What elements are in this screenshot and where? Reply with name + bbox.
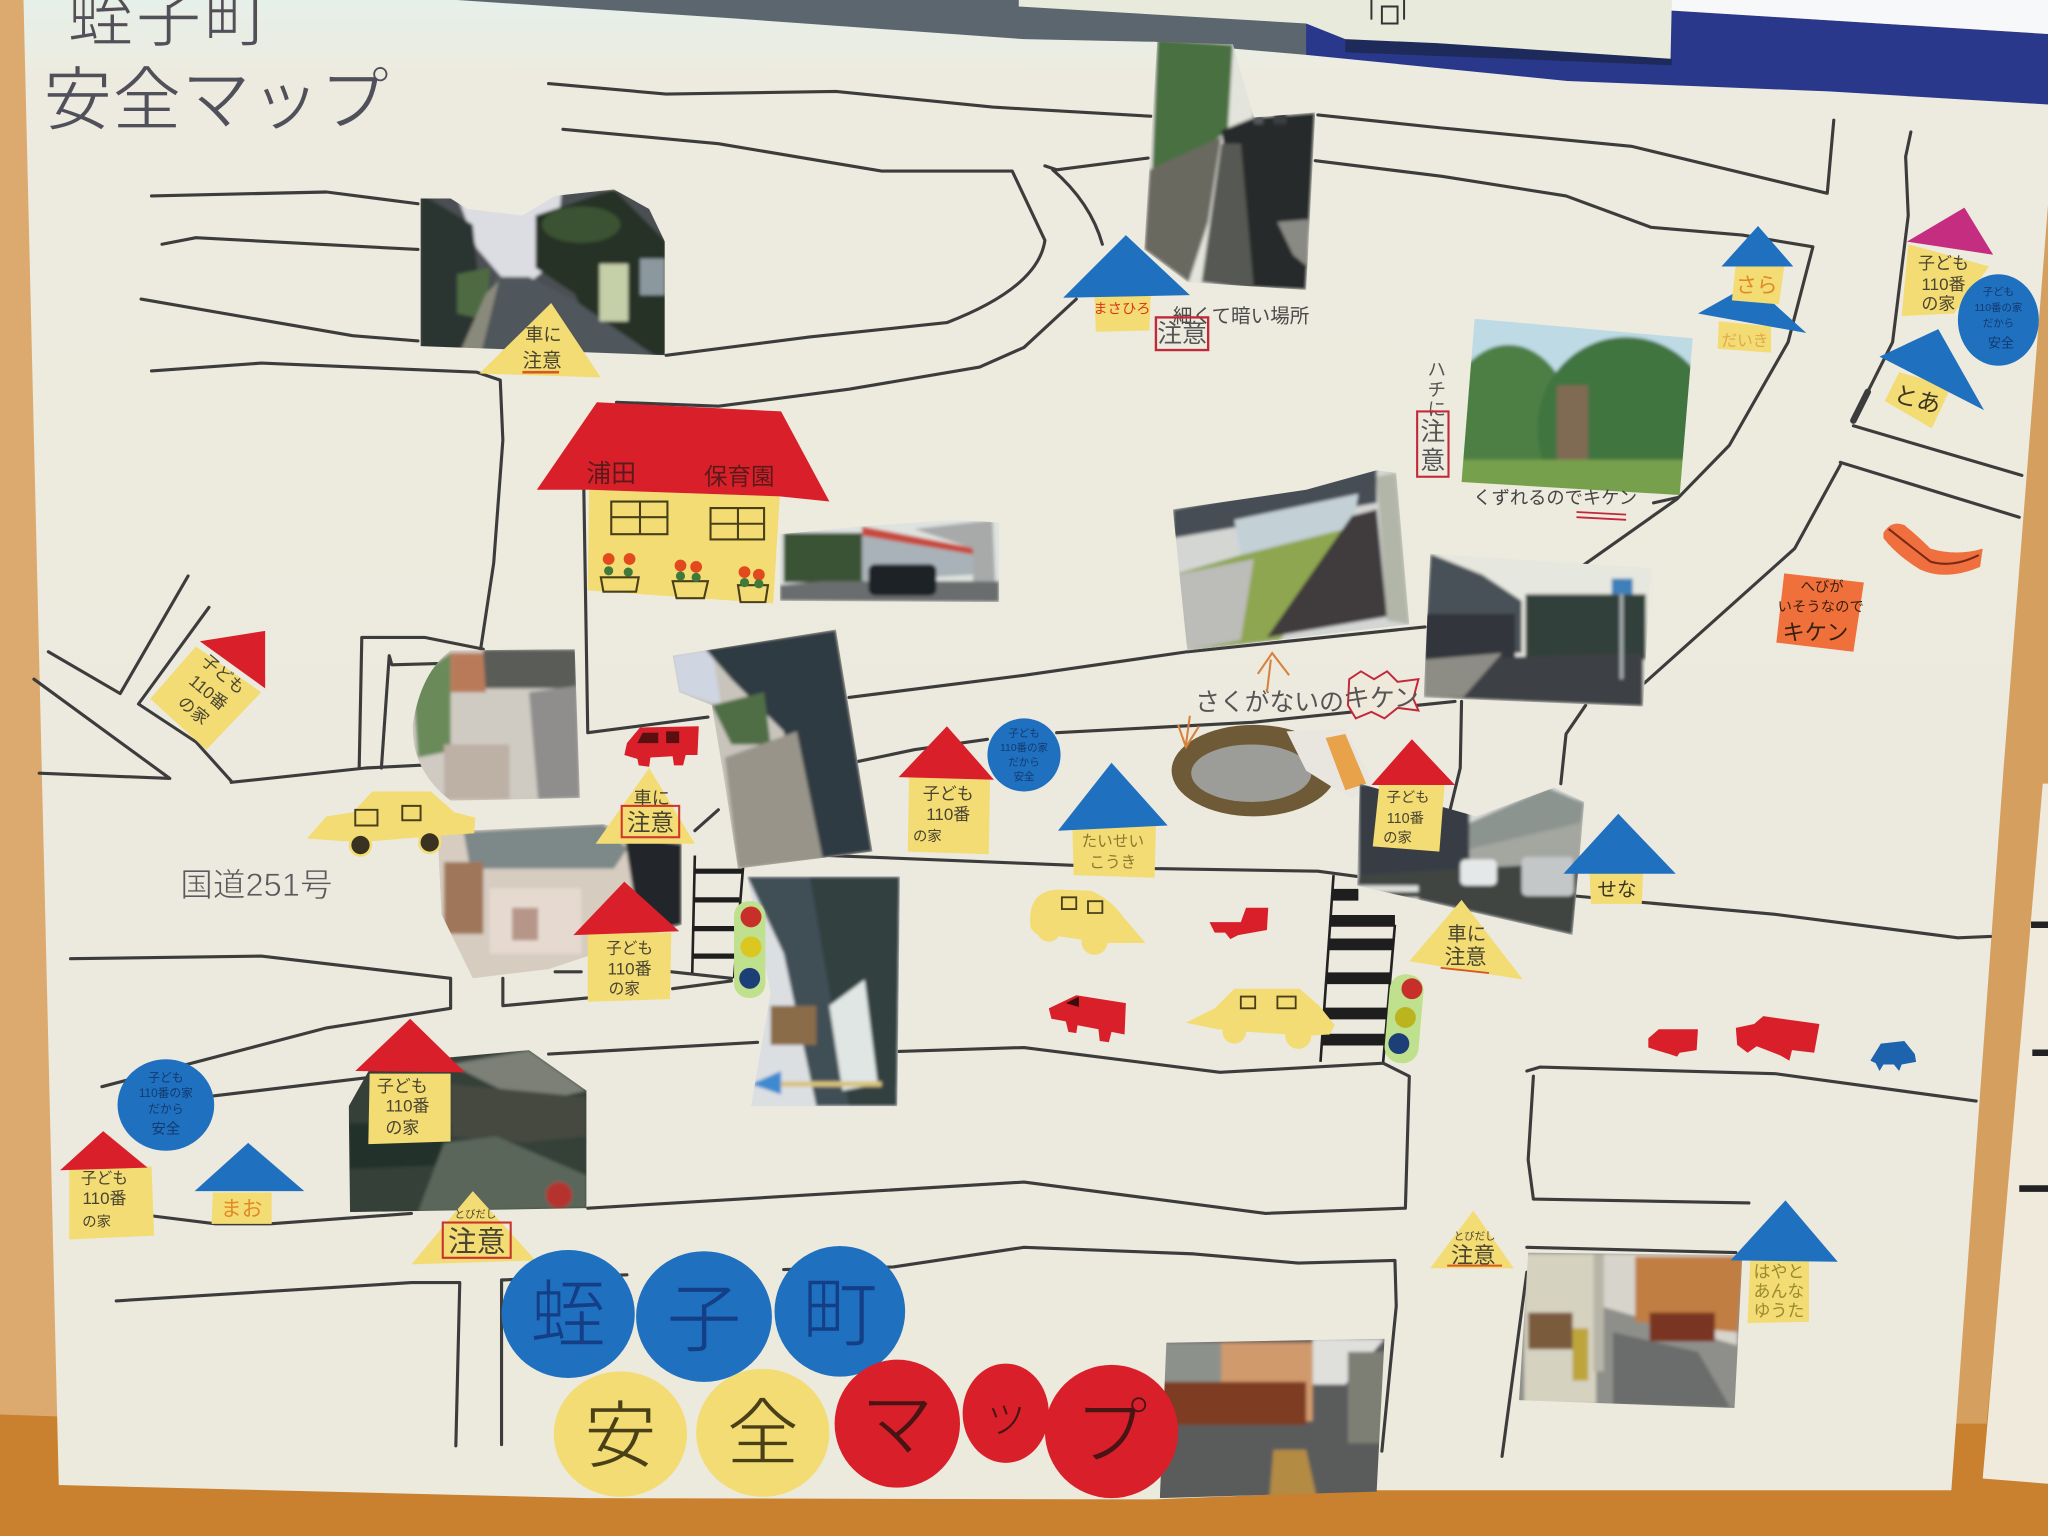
- arrows and note: no fence danger: キケン: [1345, 686, 1419, 713]
- blue note circle upper right: [1958, 274, 2039, 366]
- arrows and note: no fence danger: さくがないので: [1195, 689, 1369, 717]
- note: beware of bees: 注: [1420, 418, 1445, 446]
- circles title: 蛭子町: 子: [666, 1277, 742, 1362]
- sticker: Mao: まお: [221, 1198, 263, 1221]
- circles title: 安全マップ: 安: [584, 1397, 657, 1478]
- blue note circle upper right: 110番の家: [1974, 301, 2022, 314]
- sticker: child safety house beside shop photo: の家: [609, 980, 640, 998]
- sticker: Daiki: [1698, 283, 1806, 353]
- sticker: child safety house lower middle: の家: [385, 1119, 419, 1138]
- circles title: 安全マップ: [554, 1360, 1178, 1498]
- sticker: Masahiro: [1063, 235, 1190, 332]
- sticker: car caution triangle right: 車に: [1447, 923, 1486, 945]
- sticker: small red truck: [1209, 908, 1268, 939]
- sticker: child safety house far left: 110番: [82, 1189, 127, 1208]
- sticker: child safety house beside shop photo: 子ども: [606, 939, 653, 957]
- photo: corner with road sign: [1424, 554, 1649, 706]
- sticker: Sena: せな: [1597, 879, 1637, 901]
- sticker: car caution triangle top: 注意: [522, 350, 562, 372]
- sticker: yellow car lower: [1186, 989, 1335, 1049]
- circles title: 安全マップ: マ: [861, 1385, 934, 1466]
- note: danger collapse: [1473, 487, 1637, 520]
- note: narrow dark place caution: 細くて暗い場所: [1173, 306, 1309, 328]
- sticker: Urata nursery building: 保育園: [704, 464, 775, 490]
- blue note circle centre: [987, 718, 1061, 792]
- sticker: child safety house beside shop photo: 110番: [608, 959, 652, 978]
- sticker: Hayato, Anna, Yuuta: はやと: [1753, 1262, 1804, 1281]
- sticker: Masahiro: まさひろ: [1093, 300, 1151, 317]
- sticker: snake danger note: キケン: [1783, 620, 1848, 645]
- circles title: 安全マップ: 全: [726, 1394, 799, 1475]
- sticker: Taisei and Kouki: [1058, 763, 1168, 878]
- note: narrow dark place caution: 注意: [1157, 320, 1207, 348]
- sticker: car caution triangle with red box: 注意: [627, 810, 674, 836]
- note: danger collapse: くずれるのでキケン: [1473, 487, 1637, 508]
- handwritten title: 安全マップ: [43, 61, 389, 139]
- sticker: Urata nursery building: 浦田: [586, 460, 636, 488]
- sticker: car caution triangle top: 車に: [525, 324, 562, 345]
- photo: missing fence hole: [1172, 725, 1374, 816]
- sticker: caution triangle lower right: とびだし: [1454, 1231, 1495, 1243]
- crosswalk left: [692, 856, 743, 978]
- photo: parking and house: [1357, 784, 1584, 935]
- blue note circle lower left: 子ども: [148, 1071, 184, 1084]
- sticker: child safety house beside shop photo: [573, 882, 679, 1002]
- photo: vacant lot beside road: [1169, 464, 1417, 653]
- sticker: caution triangle lower right: 注意: [1451, 1243, 1495, 1268]
- sticker: child safety house centre: の家: [913, 828, 942, 845]
- blue note circle lower left: だから: [148, 1103, 184, 1116]
- sticker: child safety house centre: 子ども: [923, 784, 974, 803]
- sticker: blue car: [1870, 1041, 1916, 1071]
- sticker: right red truck small: [1648, 1029, 1698, 1057]
- sticker: child safety house, tilted left: の家: [174, 692, 212, 729]
- note: beware of bees: 意: [1420, 447, 1445, 475]
- note: beware of bees: ハ: [1428, 359, 1446, 380]
- sticker: child safety house, tilted left: 子ども: [198, 651, 249, 698]
- sticker: Hayato, Anna, Yuuta: ゆうた: [1753, 1302, 1804, 1321]
- sticker: child safety house lower middle: 子ども: [377, 1077, 428, 1096]
- sticker: car caution triangle top: [479, 303, 601, 377]
- upper neighbouring sheet mark: [1371, 0, 1404, 24]
- arrows and note: no fence danger: [1178, 653, 1419, 747]
- photo: nursery building: [777, 520, 1002, 605]
- blue note circle upper right: 子ども: [1983, 286, 2014, 298]
- sticker: yellow car centre top: [1030, 889, 1145, 955]
- sticker: Daiki: だいき: [1721, 332, 1768, 350]
- sticker: right red truck large: [1736, 1016, 1819, 1061]
- photo: narrow road with dark houses: [418, 189, 669, 359]
- sticker: Sara: さら: [1736, 275, 1778, 298]
- blue note circle centre: 110番の家: [1000, 741, 1048, 754]
- photo: overgrown ruin: [1462, 318, 1692, 495]
- right neighbouring sheet marks: [2019, 925, 2048, 1189]
- circles title: 安全マップ: プ: [1075, 1393, 1148, 1474]
- sticker: pink child safety house: 110番: [1921, 275, 1966, 294]
- sticker: caution triangle lower right: [1430, 1211, 1514, 1268]
- sticker: child safety house far left: [60, 1131, 154, 1240]
- sticker: pink child safety house: [1902, 208, 1993, 316]
- sticker: child safety house far left: 子ども: [81, 1169, 128, 1187]
- sticker: car caution triangle with red box: [596, 768, 695, 844]
- sticker: child safety house, tilted left: 110番: [185, 671, 231, 714]
- blue note circle centre: 安全: [1014, 770, 1035, 783]
- blue note circle centre: 子ども: [1008, 728, 1040, 740]
- blue note circle upper right: だから: [1983, 318, 2014, 330]
- photo: corner houses at tactile paving: [1156, 1335, 1388, 1502]
- road label: national route 251: 国道251号: [180, 866, 333, 903]
- sticker: Taisei and Kouki: こうき: [1089, 853, 1136, 871]
- note: beware of bees: [1417, 359, 1448, 477]
- sticker: car caution triangle with red box: 車に: [633, 788, 670, 809]
- sticker: red truck near car: [624, 726, 699, 767]
- sticker: Toa: [1880, 329, 1984, 428]
- sticker: Hayato, Anna, Yuuta: [1731, 1200, 1838, 1323]
- traffic light left: [734, 901, 765, 998]
- photo: shop front: [431, 820, 686, 984]
- photo: narrow lane with child: [346, 1045, 589, 1215]
- blue note circle lower left: [118, 1059, 214, 1151]
- blue note circle lower left: 安全: [152, 1121, 180, 1138]
- circles title: 蛭子町: [502, 1246, 905, 1382]
- sticker: Sara: [1721, 226, 1793, 304]
- sticker: Toa: とあ: [1891, 381, 1943, 418]
- photo: street with crossing guard: [1515, 1247, 1744, 1412]
- sticker: child safety house lower middle: 110番: [385, 1097, 430, 1116]
- sticker: snake danger note: いそうなので: [1778, 598, 1864, 615]
- sticker: pink child safety house: 子ども: [1918, 254, 1969, 273]
- sticker: child safety house right of manhole: 子ども: [1386, 789, 1430, 806]
- sticker: Sena: [1563, 814, 1676, 904]
- photo: street with crossing: [744, 872, 904, 1110]
- sticker: run-out caution triangle: [411, 1191, 536, 1264]
- note: narrow dark place caution: [1156, 306, 1309, 350]
- handwritten title: [43, 0, 389, 139]
- sticker: child safety house right of manhole: 110番: [1387, 810, 1424, 827]
- crosswalk right: [1320, 875, 1395, 1062]
- sticker: Taisei and Kouki: たいせい: [1082, 832, 1144, 850]
- sticker: pink child safety house: の家: [1921, 295, 1955, 314]
- sticker: child safety house centre: 110番: [926, 805, 970, 824]
- circles title: 蛭子町: 町: [802, 1272, 878, 1357]
- sticker: child safety house right of manhole: の家: [1383, 829, 1412, 846]
- sticker: red truck lower: [1049, 995, 1126, 1042]
- sticker: snake danger note: [1776, 573, 1864, 652]
- sticker: car caution triangle right: 注意: [1445, 946, 1486, 969]
- photo: shopping street: [408, 647, 584, 803]
- sticker: child safety house centre: [899, 726, 994, 854]
- note: beware of bees: に: [1428, 398, 1446, 419]
- blue note circle upper right: 安全: [1988, 335, 2014, 350]
- sticker: child safety house lower middle: [355, 1019, 465, 1144]
- photo: graveyard path: [1144, 42, 1316, 290]
- sticker: run-out caution triangle: とびだし: [455, 1208, 496, 1220]
- sticker: car caution triangle right: [1409, 900, 1523, 980]
- sticker: child safety house right of manhole: [1371, 739, 1455, 852]
- circles title: 安全マップ: ッ: [982, 1389, 1029, 1442]
- note: beware of bees: チ: [1428, 379, 1446, 400]
- sticker: run-out caution triangle: 注意: [448, 1226, 505, 1258]
- sticker: snake danger note: へびが: [1800, 579, 1844, 596]
- traffic light right: [1383, 973, 1425, 1064]
- sticker: child safety house, tilted left: [150, 631, 265, 750]
- sticker: child safety house far left: の家: [82, 1213, 111, 1230]
- sticker: orange snake: [1883, 524, 1983, 575]
- blue note circle centre: だから: [1008, 756, 1040, 768]
- photo: tilted arcade: [666, 627, 878, 875]
- sticker: Urata nursery building: [537, 402, 829, 603]
- sticker: Hayato, Anna, Yuuta: あんな: [1753, 1282, 1804, 1301]
- sticker: Mao: [195, 1143, 304, 1224]
- blue note circle lower left: 110番の家: [139, 1086, 193, 1100]
- circles title: 蛭子町: 蛭: [530, 1273, 606, 1358]
- sticker: yellow car left: [307, 792, 475, 857]
